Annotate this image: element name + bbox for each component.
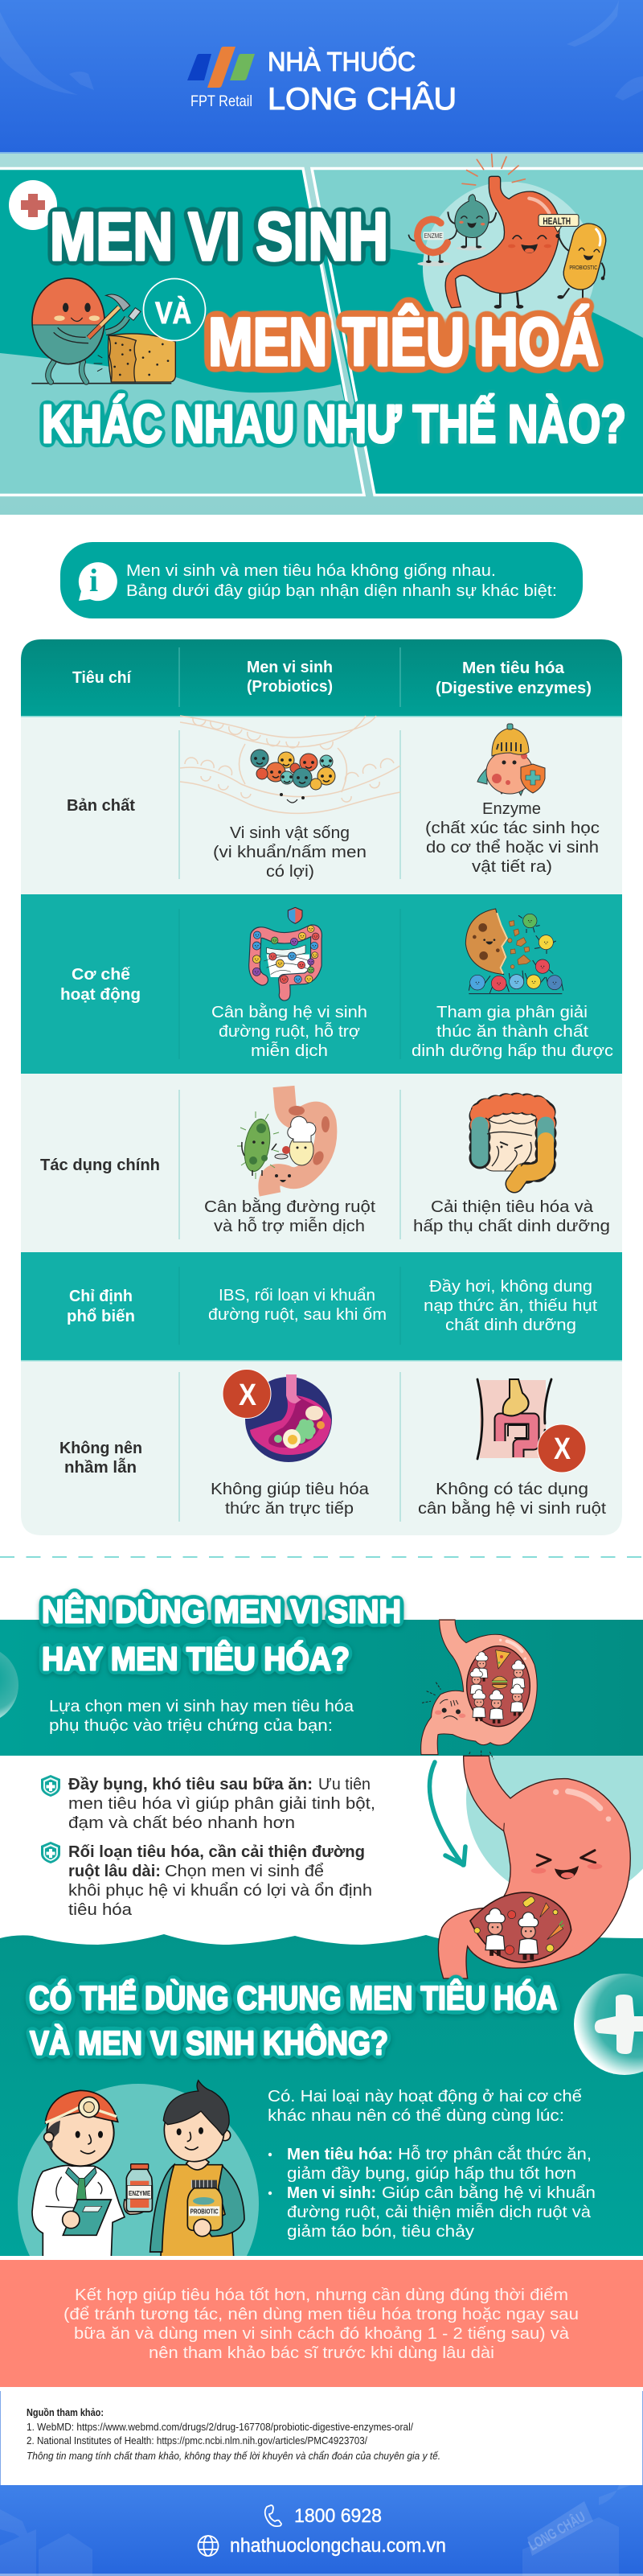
hero left panel (0, 169, 364, 495)
logo text: Nhà thuốc Long Châu (268, 46, 457, 117)
title: men vi sinh: MEN VI SINH (50, 199, 388, 274)
text: tham gia phân giải: thúc ăn thành chất (436, 1023, 589, 1041)
badge: và (143, 278, 206, 341)
illustration: probiotic cluster (180, 716, 400, 813)
arrow (429, 1762, 465, 1865)
text: không có tác dụng (418, 1481, 606, 1518)
text: đầy hơi: Đầy hơi, không dung (429, 1278, 592, 1296)
text: IBS: IBS, rối loạn vi khuẩn (219, 1287, 375, 1304)
row: không nên nhầm lẫn (21, 1360, 622, 1535)
bullet: đầy bụng: đạm và chất béo nhanh hơn (68, 1814, 295, 1832)
title: có thể dùng chung: CÓ THỂ DÙNG CHUNG MEN TIÊU HÓA (29, 1978, 557, 2017)
text: enzyme: vật tiết ra) (472, 858, 552, 876)
logo: FPT Retail (187, 47, 255, 110)
icon: cross badge left: X (239, 1378, 257, 1412)
panel: section which to choose (0, 1620, 643, 1919)
text: IBS (208, 1287, 387, 1324)
enzyme bottle (126, 2164, 153, 2212)
illustration: stomach and friends (408, 154, 609, 355)
logo text: Nhà thuốc Long Châu: LONG CHÂU (268, 82, 457, 117)
illustration: colon with grumpy face (480, 1103, 546, 1184)
bullet: rối loạn tiêu hóa: tiêu hóa (68, 1901, 133, 1919)
bullets: men tiêu hóa and men vi sinh: đường ruột, cải thiện miễn dịch ruột và (287, 2203, 592, 2221)
title: nên dùng men vi sinh hay men tiêu hóa (42, 1592, 401, 1678)
icon: cross badge right: X (554, 1432, 571, 1466)
text: đầy hơi (424, 1278, 597, 1334)
enzyme bottle: ENZYME (129, 2189, 150, 2197)
panel: advice banner: Kết hợp giúp tiêu hóa tốt hơn, nhưng cần dùng đúng thời điểm (75, 2286, 568, 2304)
panel: references (0, 2391, 643, 2485)
watermark: buildings (0, 2485, 631, 2576)
orb with plus (574, 1974, 643, 2075)
illustration: stomach and friends: ENZME (424, 232, 443, 240)
orb left (0, 1646, 18, 1723)
text: cân bằng hệ vi sinh: Cân bằng hệ vi sinh (211, 1003, 367, 1021)
illustration: gut with microbes (252, 907, 319, 995)
bullet: rối loạn tiêu hóa: Rối loạn tiêu hóa, cần cải thiện đường (68, 1843, 365, 1861)
panel: combine content (18, 1974, 643, 2256)
illustration: torso with gut (477, 1379, 551, 1459)
text: cải thiện tiêu hóa (413, 1198, 610, 1235)
panel: references: 1. WebMD: https://www.webmd.com/drugs/2/drug-167708/probiotic-digestive-enzymes-oral/ (27, 2422, 413, 2433)
text: có hai loại: khác nhau nên có thể dùng cùng lúc: (268, 2107, 564, 2125)
table header row: (Digestive enzymes) (436, 680, 592, 697)
probiotic jar (187, 2180, 223, 2230)
band (0, 1620, 643, 1756)
bullet: rối loạn tiêu hóa (41, 1842, 372, 1919)
illustration: capsule with hammer and bread (30, 276, 175, 384)
panel: references: 2. National Institutes of Health: https://pmc.ncbi.nlm.nih.gov/articles/PMC4923703/ (27, 2435, 367, 2447)
text: đầy hơi: nạp thức ăn, thiếu hụt (424, 1297, 597, 1315)
doctor (32, 2090, 153, 2258)
probiotic jar: PROBIOTIC (190, 2207, 219, 2215)
row: tác dụng chính (21, 1074, 622, 1252)
bullet: đầy bụng: Ưu tiên (318, 1776, 371, 1793)
text: cân bằng đường ruột (204, 1198, 375, 1235)
illustration: happy stomach with chefs (438, 1756, 630, 1978)
row: chỉ định phổ biến (21, 1252, 622, 1360)
row: cơ chế hoạt động (21, 894, 622, 1074)
row: bản chất: Bản chất (67, 797, 135, 815)
text: cân bằng đường ruột: và hỗ trợ miễn dịch (214, 1217, 365, 1235)
intro text (49, 1698, 354, 1735)
title: nên dùng men vi sinh hay men tiêu hóa: HAY MEN TIÊU HÓA? (42, 1641, 350, 1678)
bullet: rối loạn tiêu hóa: ruột lâu dài: (68, 1863, 161, 1880)
intro text: Men vi sinh và men tiêu hóa không giống nhau. (126, 562, 496, 580)
text: không có tác dụng: Không có tác dụng (436, 1481, 588, 1498)
illustration: doctor and patient (18, 2080, 259, 2256)
text: vi sinh vật sống: (vi khuẩn/nấm men (213, 844, 367, 861)
illustration: stomach and friends: PROBIOSTIC (569, 264, 598, 271)
illustration: cookie and enzymes (465, 909, 563, 994)
row: bản chất (21, 716, 622, 894)
row: không nên nhầm lẫn: nhầm lẫn (64, 1457, 137, 1477)
row: không nên nhầm lẫn: Không nên (59, 1440, 142, 1457)
text: vi sinh vật sống: Vi sinh vật sống (230, 824, 350, 842)
bullets: men tiêu hóa and men vi sinh: Men vi sinh: (287, 2184, 376, 2202)
illustration: stomach with food (245, 1374, 332, 1462)
panel: references: Nguồn tham khảo: (27, 2407, 104, 2418)
table header row: Men tiêu hóa (462, 659, 565, 677)
text: cân bằng hệ vi sinh: đường ruột, hỗ trợ (219, 1022, 360, 1041)
text: vi sinh vật sống (213, 824, 367, 881)
intro text (126, 562, 557, 600)
watermark: store sign: LONG CHÂU (526, 2508, 588, 2553)
text: cân bằng đường ruột: Cân bằng đường ruột (204, 1198, 375, 1216)
text: không giúp tiêu hóa: thức ăn trực tiếp (225, 1500, 354, 1518)
callout: intro pill (60, 542, 583, 618)
title: có thể dùng chung: VÀ MEN VI SINH KHÔNG? (30, 2023, 388, 2062)
text: có hai loại: Có. Hai loại này hoạt động ở hai cơ chế (268, 2088, 582, 2106)
intro text: Lựa chọn men vi sinh hay men tiêu hóa (49, 1698, 354, 1715)
panel: section can combine (0, 1934, 643, 2260)
illustration: colon with chef and bacterium (237, 1087, 330, 1194)
intro text: phụ thuộc vào triệu chứng của bạn: (49, 1717, 333, 1735)
icon: info bubble: i (89, 562, 98, 598)
text: không có tác dụng: cân bằng hệ vi sinh ruột (418, 1499, 606, 1518)
bullet: rối loạn tiêu hóa: khôi phục hệ vi khuẩn có lợi và ổn định (68, 1882, 372, 1900)
patient (150, 2081, 244, 2258)
text: enzyme (425, 800, 600, 876)
text: cân bằng hệ vi sinh: miễn dịch (251, 1041, 328, 1060)
text: enzyme: do cơ thể hoặc vi sinh (426, 839, 599, 857)
row: cơ chế hoạt động: hoạt động (60, 986, 141, 1004)
icon: cross badge left (223, 1369, 271, 1419)
bullet: đầy bụng (41, 1775, 375, 1832)
text: enzyme: Enzyme (482, 800, 541, 818)
text: đầy hơi: chất dinh dưỡng (445, 1317, 576, 1334)
text: tham gia phân giải (412, 1004, 613, 1060)
table header row: (Probiotics) (247, 678, 333, 696)
bullets: men tiêu hóa and men vi sinh (268, 2145, 596, 2241)
logo text: Nhà thuốc Long Châu: NHÀ THUỐC (268, 46, 416, 76)
row: tác dụng chính: Tác dụng chính (40, 1157, 160, 1174)
panel: advice banner: (để tránh tương tác, nên dùng men tiêu hóa trong hoặc ngay sau (63, 2306, 579, 2323)
contact: website: nhathuoclongchau.com.vn (230, 2535, 446, 2557)
text: có hai loại (268, 2088, 582, 2125)
logo: FPT Retail: FPT Retail (190, 93, 252, 110)
icon: plus badge (9, 180, 57, 230)
row: chỉ định phổ biến: phổ biến (67, 1308, 135, 1325)
row: cơ chế hoạt động: Cơ chế (72, 966, 131, 984)
text: tham gia phân giải: dinh dưỡng hấp thu được (412, 1042, 613, 1060)
row: chỉ định phổ biến: Chỉ định (69, 1288, 133, 1305)
panel: references: Thông tin mang tính chất tham khảo, không thay thế lời khuyên và chẩn đoán của chuyên gia y tế. (27, 2451, 440, 2462)
bullet: đầy bụng: Đầy bụng, khó tiêu sau bữa ăn: (68, 1776, 313, 1793)
table header row: Tiêu chí (72, 669, 132, 687)
bullet: rối loạn tiêu hóa: Chọn men vi sinh để (165, 1863, 324, 1880)
bullets: men tiêu hóa and men vi sinh: giảm đầy bụng, giúp hấp thu tốt hơn (287, 2165, 576, 2183)
title: nên dùng men vi sinh hay men tiêu hóa: NÊN DÙNG MEN VI SINH (42, 1592, 401, 1629)
text: IBS: đường ruột, sau khi ốm (208, 1306, 387, 1324)
table header row (21, 639, 622, 716)
panel: advice banner: bữa ăn và dùng men vi sinh cách đó khoảng 1 - 2 tiếng sau) và (74, 2325, 570, 2343)
text: cải thiện tiêu hóa: Cải thiện tiêu hóa và (431, 1198, 594, 1216)
contact: phone: 1800 6928 (294, 2505, 382, 2527)
text: không giúp tiêu hóa (211, 1481, 370, 1518)
bullets: men tiêu hóa and men vi sinh: Giúp cân bằng hệ vi khuẩn (382, 2184, 596, 2202)
hero right panel (312, 169, 643, 495)
panel: advice banner: nên tham khảo bác sĩ trước khi dùng lâu dài (149, 2344, 494, 2362)
text: enzyme: (chất xúc tác sinh học (425, 820, 600, 837)
icon: info bubble (79, 562, 117, 601)
bullet: đầy bụng: men tiêu hóa vì giúp phân giải tinh bột, (68, 1795, 375, 1813)
text: tham gia phân giải: Tham gia phân giải (436, 1004, 588, 1021)
icon: cross badge right (538, 1424, 586, 1473)
illustration: stomach and friends: HEALTH (543, 216, 571, 227)
text: cải thiện tiêu hóa: hấp thụ chất dinh dưỡng (413, 1218, 610, 1235)
panel: header (0, 0, 643, 152)
panel: advice banner (0, 2260, 643, 2387)
bullets: men tiêu hóa and men vi sinh: Men tiêu hóa: (287, 2146, 393, 2163)
intro text: Bảng dưới đây giúp bạn nhận diện nhanh sự khác biệt: (126, 582, 557, 600)
table header row: Men vi sinh (247, 659, 333, 676)
bullets: men tiêu hóa and men vi sinh: giảm táo bón, tiêu chảy (287, 2223, 474, 2241)
badge: và: VÀ (155, 295, 191, 331)
illustration: overfull stomach with chefs (421, 1619, 537, 1764)
illustration: knight enzyme (477, 724, 545, 795)
title: có thể dùng chung (29, 1978, 557, 2062)
bullets: men tiêu hóa and men vi sinh: Hỗ trợ phân cắt thức ăn, (398, 2145, 592, 2163)
panel: footer (0, 2485, 643, 2576)
panel: comparison table (21, 639, 622, 1535)
text: cân bằng hệ vi sinh (211, 1003, 367, 1060)
panel: hero (0, 152, 643, 515)
text: vi sinh vật sống: có lợi) (266, 863, 314, 881)
text: không giúp tiêu hóa: Không giúp tiêu hóa (211, 1481, 370, 1498)
